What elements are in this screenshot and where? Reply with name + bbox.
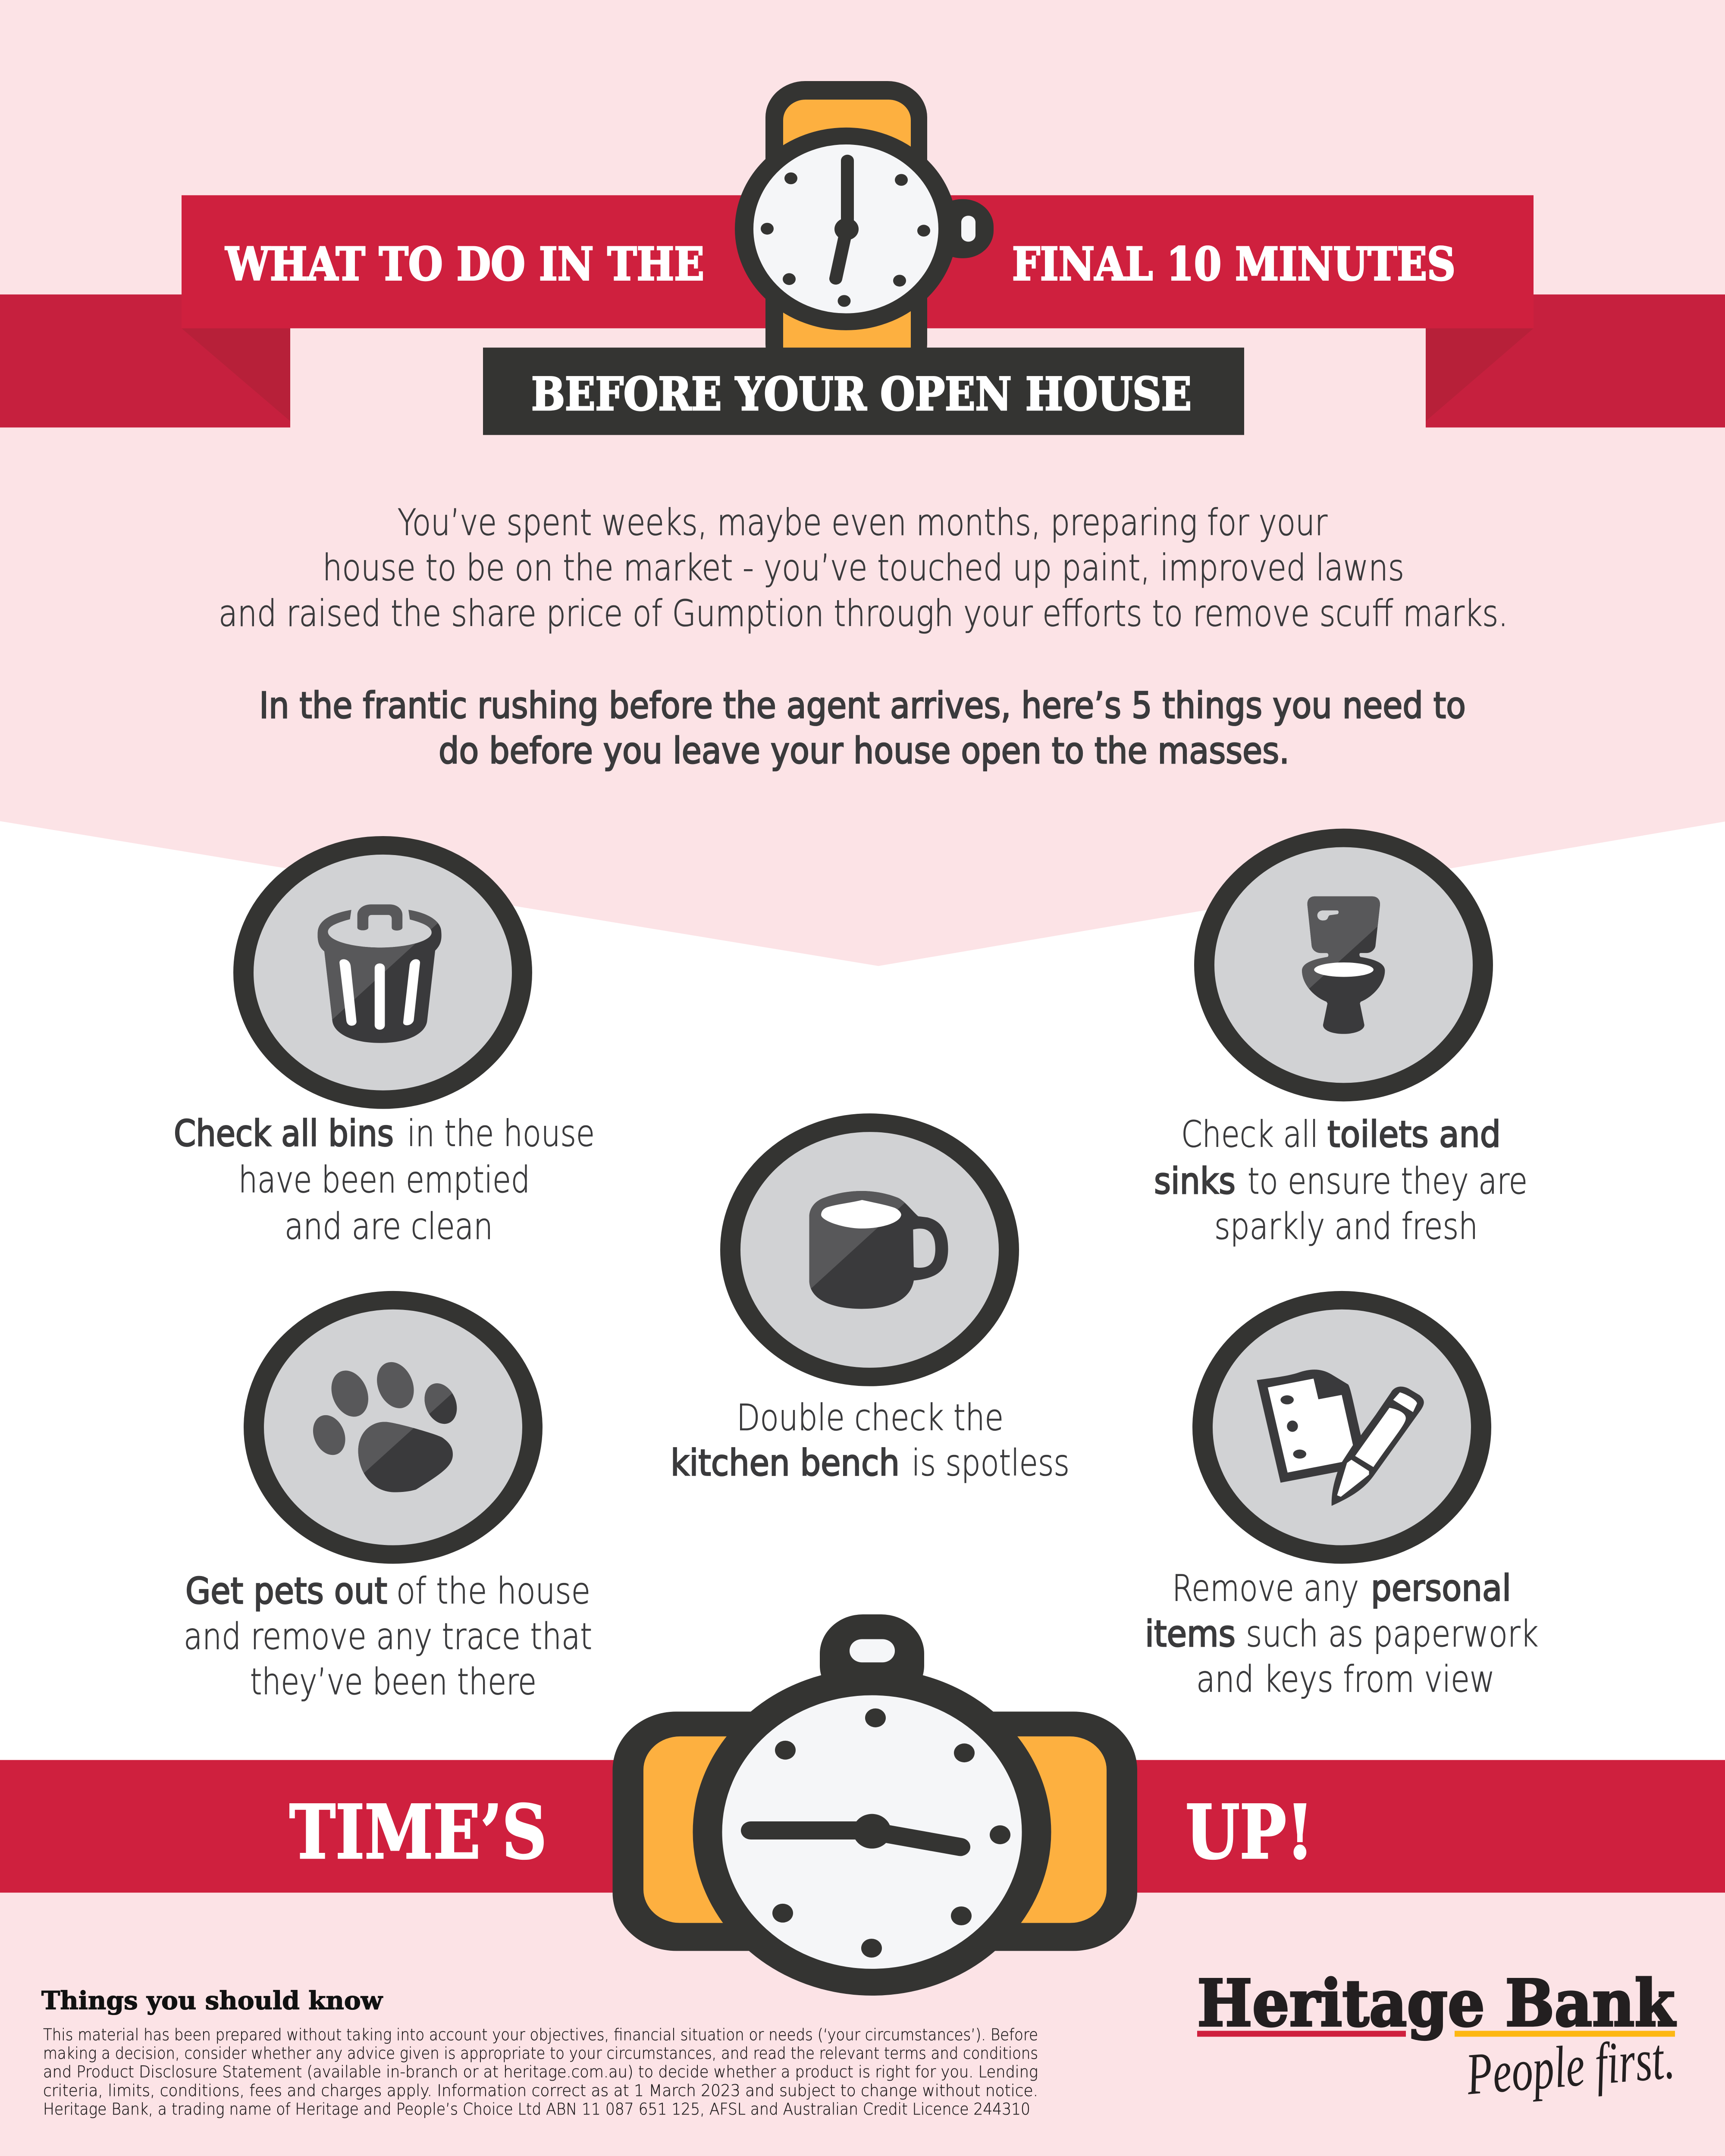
text block: legal disclaimer	[43, 2026, 1038, 2119]
icon: large watch at quarter to three	[612, 1614, 1137, 1982]
text: check toilets and sinks: sparkly and fresh	[1214, 1205, 1478, 1247]
icon: paw print in circle	[254, 1300, 532, 1554]
text: check toilets and sinks: toilets and	[1327, 1113, 1501, 1155]
text: check all bins: Check all bins	[174, 1112, 394, 1154]
heading box: before your open house: BEFORE YOUR OPEN HOUSE	[531, 367, 1192, 420]
heading: time's: TIME’S	[289, 1789, 547, 1876]
text: check all bins: have been emptied	[238, 1159, 530, 1201]
heading: what to do in the: WHAT TO DO IN THE	[225, 238, 704, 291]
text: check toilets and sinks: sinks	[1154, 1160, 1236, 1202]
text block: bold introduction: In the frantic rushing before the agent arrives, here’s 5 things you need to	[259, 684, 1466, 727]
text: remove personal items: Remove any	[1172, 1567, 1359, 1609]
panel: pink footer background	[0, 1893, 1725, 2156]
text: remove personal items: personal	[1371, 1567, 1511, 1609]
text block: legal disclaimer: making a decision, consider whether any advice given is appropriate to your circumstances, and read the relevant terms and conditions	[43, 2044, 1038, 2063]
text: kitchen bench: kitchen bench	[671, 1442, 900, 1484]
text: get pets out: and remove any trace that	[184, 1615, 592, 1658]
text: check all bins: in the house	[407, 1112, 595, 1154]
heading box: before your open house	[483, 348, 1244, 435]
text: get pets out: they’ve been there	[250, 1661, 536, 1703]
text: check toilets and sinks	[1154, 1113, 1527, 1247]
text: check all bins	[174, 1112, 595, 1247]
icon: wristwatch at six o'clock	[744, 81, 994, 380]
text: remove personal items: items	[1145, 1613, 1236, 1655]
icon: toilet in circle	[1204, 838, 1483, 1092]
text: remove personal items: such as paperwork	[1246, 1613, 1538, 1655]
text: get pets out	[184, 1570, 592, 1703]
icon: coffee mug in circle	[731, 1123, 1009, 1377]
heading: final 10 minutes: FINAL 10 MINUTES	[1012, 238, 1455, 291]
text block: bold introduction: do before you leave your house open to the masses.	[439, 730, 1289, 772]
text: check all bins: and are clean	[285, 1205, 493, 1247]
heading: up!: UP!	[1186, 1789, 1314, 1876]
text block: legal disclaimer: and Product Disclosure Statement (available in-branch or at heritage.com.au) to decide whether a product is right for you. Lending	[43, 2063, 1038, 2081]
text block: introduction: house to be on the market - you’ve touched up paint, improved lawns	[323, 546, 1404, 589]
text: check toilets and sinks: Check all	[1181, 1113, 1318, 1155]
panel: pink chevron header background	[0, 0, 1725, 966]
text: get pets out: of the house	[396, 1570, 590, 1612]
text block: legal disclaimer: Heritage Bank, a trading name of Heritage and People’s Choice Ltd ABN 11 087 651 125, AFSL and Australian Credit Licence 244310	[43, 2100, 1030, 2119]
text block: legal disclaimer: This material has been prepared without taking into account your objectives, financial situation or needs (‘your circumstances’). Before	[43, 2026, 1038, 2044]
heading: things you should know: Things you should know	[41, 1986, 383, 2015]
text: check toilets and sinks: to ensure they are	[1248, 1160, 1527, 1202]
text: kitchen bench: Double check the	[737, 1396, 1004, 1439]
text block: introduction	[219, 501, 1508, 635]
text block: introduction: You’ve spent weeks, maybe even months, preparing for your	[398, 501, 1328, 544]
text block: bold introduction	[259, 684, 1466, 772]
text: remove personal items	[1145, 1567, 1538, 1700]
icon: paperwork and pencil in circle	[1202, 1300, 1481, 1554]
icon: rubbish bin in circle	[243, 845, 522, 1100]
logo: Heritage Bank	[1197, 1965, 1677, 2107]
text block: legal disclaimer: criteria, limits, conditions, fees and charges apply. Information correct as at 1 March 2023 and subject to change without notice.	[43, 2082, 1038, 2100]
text: remove personal items: and keys from view	[1196, 1658, 1495, 1700]
text: kitchen bench	[671, 1396, 1070, 1484]
text: get pets out: Get pets out	[185, 1570, 387, 1612]
text: kitchen bench: is spotless	[912, 1442, 1070, 1484]
banner: red time's up band	[0, 1760, 1725, 1893]
banner: red ribbon with tails	[0, 195, 1725, 427]
